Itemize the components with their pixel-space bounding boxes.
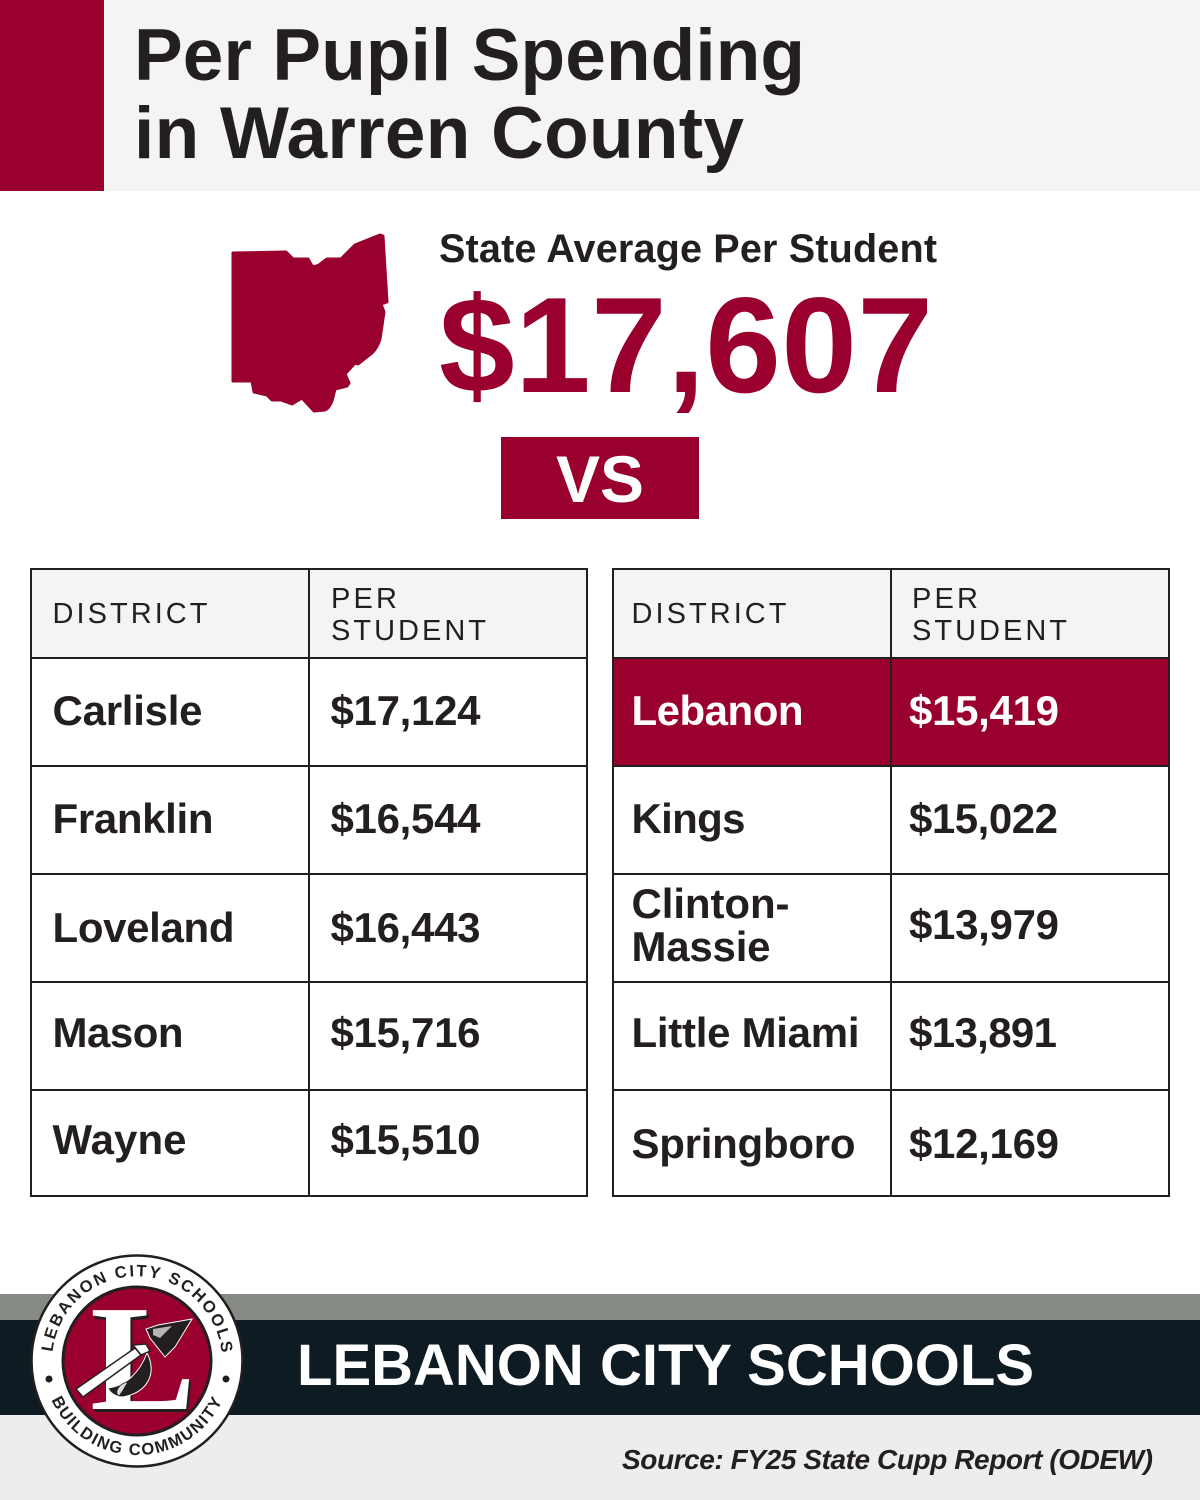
highlighted row: Lebanon: Lebanon xyxy=(632,687,804,734)
left table header: PER xyxy=(331,583,397,615)
row: Loveland: $16,443 xyxy=(330,904,480,951)
row: Clinton-Massie: Massie xyxy=(632,923,770,970)
row: Mason: Mason xyxy=(52,1009,184,1056)
row: Springboro: $12,169 xyxy=(909,1120,1059,1167)
footer banner xyxy=(0,1294,1200,1500)
logo: Lebanon City Schools seal: L xyxy=(90,1275,196,1442)
row: Carlisle: $17,124 xyxy=(330,687,481,734)
source note: Source: FY25 State Cupp Report (ODEW) xyxy=(622,1444,1153,1475)
row: Little Miami: Little Miami xyxy=(632,1009,860,1056)
title: Per Pupil Spending xyxy=(134,15,805,96)
left table header: STUDENT xyxy=(331,615,486,647)
left table header xyxy=(52,583,486,647)
highlighted row: Lebanon xyxy=(613,658,1169,766)
right table header: STUDENT xyxy=(912,615,1067,647)
row: Carlisle: Carlisle xyxy=(52,687,202,734)
row: Clinton-Massie xyxy=(632,880,1059,970)
row: Wayne: $15,510 xyxy=(330,1116,480,1163)
row: Clinton-Massie: Clinton- xyxy=(632,880,790,927)
row: Springboro xyxy=(632,1120,1059,1167)
row: Springboro: Springboro xyxy=(632,1120,856,1167)
row: Mason: $15,716 xyxy=(330,1009,480,1056)
VS badge xyxy=(501,437,699,519)
right table header: PER xyxy=(912,583,978,615)
row: Mason xyxy=(52,1009,480,1056)
logo: Lebanon City Schools seal: L xyxy=(92,1278,198,1445)
logo: Lebanon City Schools seal xyxy=(30,1254,244,1468)
table: left districts xyxy=(31,569,587,1196)
row: Little Miami: $13,891 xyxy=(909,1009,1057,1056)
row: Kings: $15,022 xyxy=(909,795,1058,842)
right table header xyxy=(632,583,1067,647)
row: Franklin: $16,544 xyxy=(330,795,481,842)
header band xyxy=(0,0,1200,191)
table: right districts xyxy=(613,569,1169,1196)
highlighted row: Lebanon: $15,419 xyxy=(909,687,1059,734)
footer organisation name: LEBANON CITY SCHOOLS xyxy=(297,1333,1034,1398)
row: Little Miami xyxy=(632,1009,1057,1056)
row: Loveland xyxy=(52,904,480,951)
state average value: $17,607 xyxy=(439,269,933,421)
row: Franklin: Franklin xyxy=(52,795,214,842)
logo: Lebanon City Schools seal: BUILDING COMMUNITY xyxy=(52,1396,220,1456)
icon: Ohio state silhouette xyxy=(233,235,387,411)
row: Clinton-Massie: $13,979 xyxy=(909,901,1059,948)
row: Wayne xyxy=(52,1116,480,1163)
left table header: DISTRICT xyxy=(52,598,208,630)
title: in Warren County xyxy=(134,93,744,174)
row: Kings xyxy=(632,795,1058,842)
row: Wayne: Wayne xyxy=(52,1116,186,1163)
state average label: State Average Per Student xyxy=(439,227,937,271)
right table header: DISTRICT xyxy=(632,598,787,630)
title xyxy=(134,15,805,174)
row: Kings: Kings xyxy=(632,795,746,842)
row: Carlisle xyxy=(52,687,481,734)
VS badge: VS xyxy=(556,442,644,516)
row: Loveland: Loveland xyxy=(52,904,234,951)
row: Franklin xyxy=(52,795,481,842)
logo: Lebanon City Schools seal: LEBANON CITY SCHOOLS xyxy=(41,1264,232,1352)
